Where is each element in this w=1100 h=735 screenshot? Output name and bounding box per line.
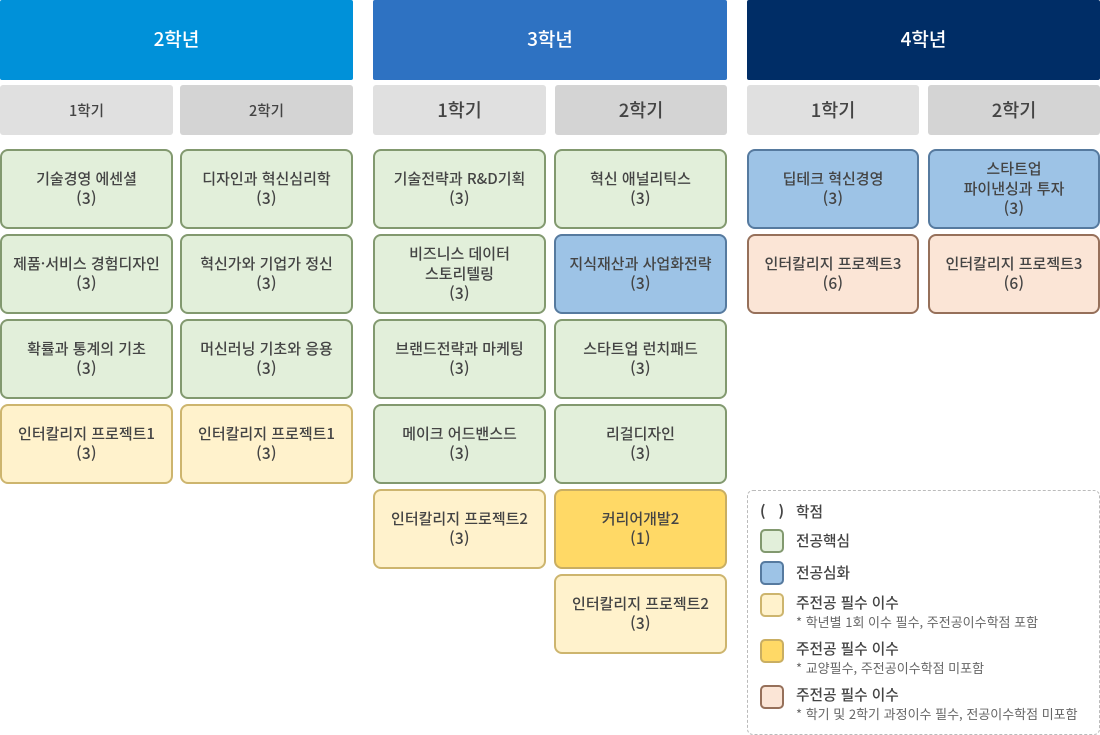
course: 딥테크 혁신경영	[747, 149, 919, 229]
course: 딥테크 혁신경영: (3)	[823, 187, 843, 209]
course: 혁신 애널리틱스: 혁신 애널리틱스	[590, 168, 691, 189]
legend label: 전공심화: 전공심화	[796, 562, 850, 583]
legend label: 전공핵심: 전공핵심	[796, 530, 850, 551]
legend note: * 학년별 1회 이수 필수, 주전공이수학점 포함	[796, 612, 1038, 631]
course: 비즈니스 데이터 스토리텔링	[373, 234, 546, 314]
course: 인터칼리지 프로젝트3: 인터칼리지 프로젝트3	[946, 253, 1082, 274]
course: 지식재산과 사업화전략: (3)	[630, 272, 651, 294]
header: 2학년	[0, 0, 353, 80]
course: 디자인과 혁신심리학: 디자인과 혁신심리학	[202, 168, 331, 189]
legend swatch: 전공핵심	[760, 529, 784, 553]
course: 인터칼리지 프로젝트1	[0, 404, 173, 484]
course: 인터칼리지 프로젝트1: 인터칼리지 프로젝트1	[18, 423, 155, 444]
legend: credit symbol: (	[760, 501, 766, 522]
course: 인터칼리지 프로젝트2: (3)	[630, 612, 651, 634]
course: 인터칼리지 프로젝트1	[180, 404, 353, 484]
course: 인터칼리지 프로젝트3	[928, 234, 1100, 314]
course: 비즈니스 데이터 스토리텔링: (3)	[449, 282, 470, 304]
course: 인터칼리지 프로젝트1: (3)	[256, 442, 277, 464]
course: 인터칼리지 프로젝트2: 인터칼리지 프로젝트2	[572, 593, 709, 614]
legend	[747, 490, 1100, 735]
course: 혁신가와 기업가 정신: (3)	[256, 272, 277, 294]
course: 리걸디자인	[554, 404, 727, 484]
legend note: * 학기 및 2학기 과정이수 필수, 전공이수학점 미포함	[796, 704, 1078, 723]
course: 스타트업 파이낸싱과 투자: 스타트업	[986, 158, 1042, 179]
course: 딥테크 혁신경영: 딥테크 혁신경영	[783, 168, 883, 189]
course: 메이크 어드밴스드: (3)	[449, 442, 470, 464]
semester: 3학년 1학기	[373, 85, 546, 135]
semester: 4학년 1학기: 1학기	[811, 97, 855, 123]
semester: 2학년 2학기	[180, 85, 353, 135]
course: 기술전략과 R&D기획: 기술전략과 R&D기획	[394, 168, 525, 189]
semester: 4학년 1학기	[747, 85, 919, 135]
course: 기술전략과 R&D기획	[373, 149, 546, 229]
course: 기술경영 에센셜	[0, 149, 173, 229]
legend label: 주전공 필수 이수: 주전공 필수 이수	[796, 638, 899, 659]
course: 리걸디자인: (3)	[630, 442, 651, 464]
course: 리걸디자인: 리걸디자인	[606, 423, 675, 444]
legend swatch: 주전공 필수 이수 (교양)	[760, 639, 784, 663]
course: 인터칼리지 프로젝트1: 인터칼리지 프로젝트1	[198, 423, 335, 444]
course: 메이크 어드밴스드	[373, 404, 546, 484]
course: 머신러닝 기초와 응용: 머신러닝 기초와 응용	[200, 338, 333, 359]
course: 기술경영 에센셜: 기술경영 에센셜	[36, 168, 137, 189]
legend note: * 교양필수, 주전공이수학점 미포함	[796, 658, 984, 677]
legend swatch: 전공심화	[760, 561, 784, 585]
course: 스타트업 파이낸싱과 투자: 파이낸싱과 투자	[964, 178, 1064, 199]
semester: 3학년 2학기	[555, 85, 727, 135]
course: 지식재산과 사업화전략	[554, 234, 727, 314]
semester: 4학년 2학기	[928, 85, 1100, 135]
course: 스타트업 런치패드	[554, 319, 727, 399]
course: 커리어개발2: (1)	[630, 527, 651, 549]
legend: credit symbol	[760, 501, 784, 522]
course: 확률과 통계의 기초: (3)	[76, 357, 97, 379]
course: 혁신가와 기업가 정신: 혁신가와 기업가 정신	[200, 253, 333, 274]
header: 2학년: 2학년	[154, 24, 199, 52]
header: 4학년: 4학년	[901, 24, 946, 52]
course: 인터칼리지 프로젝트2: 인터칼리지 프로젝트2	[391, 508, 528, 529]
semester: 3학년 1학기: 1학기	[437, 97, 482, 123]
course: 확률과 통계의 기초	[0, 319, 173, 399]
course: 인터칼리지 프로젝트3	[747, 234, 919, 314]
course: 혁신가와 기업가 정신	[180, 234, 353, 314]
course: 커리어개발2: 커리어개발2	[602, 508, 679, 529]
course: 스타트업 파이낸싱과 투자	[928, 149, 1100, 229]
header: 4학년	[747, 0, 1100, 80]
course: 인터칼리지 프로젝트3: 인터칼리지 프로젝트3	[765, 253, 901, 274]
course: 디자인과 혁신심리학: (3)	[256, 187, 277, 209]
course: 비즈니스 데이터 스토리텔링: 비즈니스 데이터	[409, 243, 510, 264]
course: 혁신 애널리틱스: (3)	[630, 187, 651, 209]
course: 브랜드전략과 마케팅: (3)	[449, 357, 470, 379]
course: 기술경영 에센셜: (3)	[76, 187, 97, 209]
course: 브랜드전략과 마케팅	[373, 319, 546, 399]
course: 제품·서비스 경험디자인: 제품·서비스 경험디자인	[13, 253, 160, 274]
course: 디자인과 혁신심리학	[180, 149, 353, 229]
semester: 4학년 2학기: 2학기	[992, 97, 1036, 123]
legend swatch: 주전공 필수 이수 (과정)	[760, 685, 784, 709]
course: 커리어개발2	[554, 489, 727, 569]
legend swatch: 주전공 필수 이수 (프로젝트)	[760, 593, 784, 617]
semester: 2학년 1학기: 1학기	[69, 100, 104, 120]
course: 인터칼리지 프로젝트3: (6)	[823, 272, 843, 294]
course: 인터칼리지 프로젝트3: (6)	[1004, 272, 1024, 294]
course: 제품·서비스 경험디자인: (3)	[76, 272, 97, 294]
course: 인터칼리지 프로젝트2	[373, 489, 546, 569]
course: 브랜드전략과 마케팅: 브랜드전략과 마케팅	[395, 338, 524, 359]
course: 제품·서비스 경험디자인	[0, 234, 173, 314]
course: 기술전략과 R&D기획: (3)	[449, 187, 470, 209]
course: 인터칼리지 프로젝트2: (3)	[449, 527, 470, 549]
header: 3학년: 3학년	[527, 24, 573, 52]
course: 비즈니스 데이터 스토리텔링: 스토리텔링	[425, 263, 494, 284]
course: 스타트업 파이낸싱과 투자: (3)	[1004, 197, 1024, 219]
legend label: 주전공 필수 이수: 주전공 필수 이수	[796, 592, 899, 613]
semester: 3학년 2학기: 2학기	[619, 97, 663, 123]
course: 스타트업 런치패드: 스타트업 런치패드	[583, 338, 698, 359]
course: 인터칼리지 프로젝트2	[554, 574, 727, 654]
legend: credit symbol: )	[778, 501, 784, 522]
course: 인터칼리지 프로젝트1: (3)	[76, 442, 97, 464]
course: 지식재산과 사업화전략: 지식재산과 사업화전략	[569, 253, 712, 274]
course: 머신러닝 기초와 응용	[180, 319, 353, 399]
legend label: 주전공 필수 이수: 주전공 필수 이수	[796, 684, 899, 705]
semester: 2학년 1학기	[0, 85, 173, 135]
course: 메이크 어드밴스드: 메이크 어드밴스드	[402, 423, 517, 444]
course: 스타트업 런치패드: (3)	[630, 357, 651, 379]
legend: credit label: 학점	[796, 501, 823, 522]
course: 혁신 애널리틱스	[554, 149, 727, 229]
header: 3학년	[373, 0, 727, 80]
semester: 2학년 2학기: 2학기	[249, 100, 284, 120]
course: 확률과 통계의 기초: 확률과 통계의 기초	[27, 338, 146, 359]
course: 머신러닝 기초와 응용: (3)	[256, 357, 277, 379]
